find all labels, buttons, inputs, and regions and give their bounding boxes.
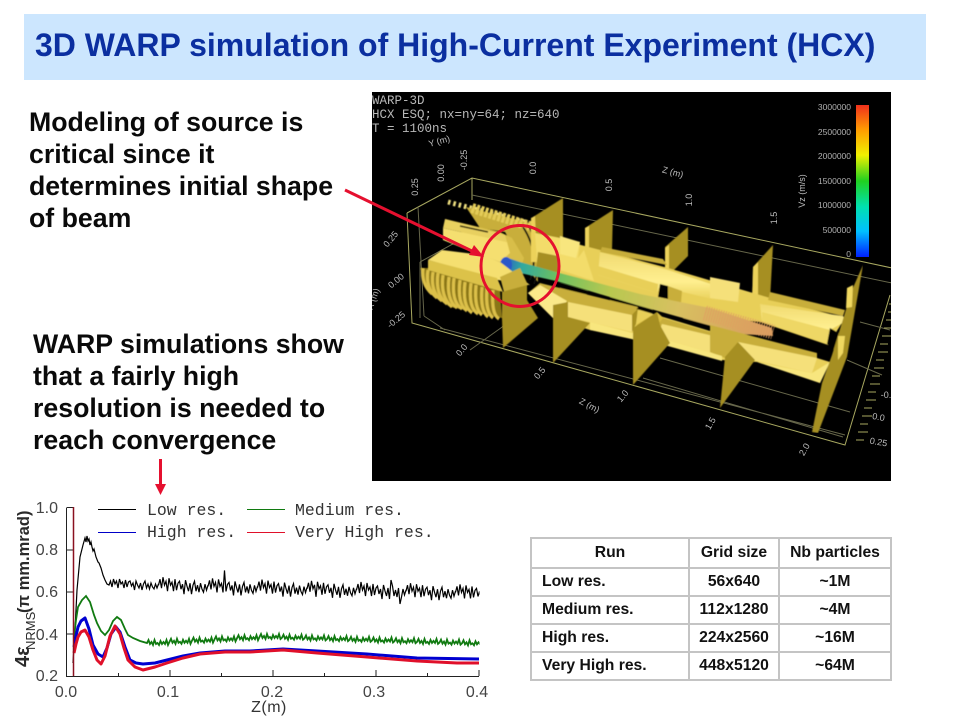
- table: run parameters: Nb particles: [790, 544, 880, 561]
- axis labels: 0.0: [528, 162, 538, 174]
- text block: WARP simulations: [33, 329, 344, 455]
- tick labels: 0.1: [157, 684, 179, 701]
- lower rail segments: [528, 283, 830, 383]
- axis labels: -0.: [881, 390, 891, 400]
- tick labels: 0.4: [36, 627, 58, 644]
- axis labels: 2.0: [797, 442, 812, 457]
- colour bar: 1000000: [818, 200, 851, 210]
- table: run parameters: Run: [595, 544, 625, 561]
- table: run parameters: Very High res.: [542, 657, 647, 674]
- tick labels: 0.2: [36, 668, 58, 685]
- wireframe axes box: [407, 178, 896, 445]
- title banner: [24, 14, 926, 80]
- plate 5: [812, 265, 863, 433]
- electrode structure: [420, 198, 863, 433]
- text block: source modeling: critical since it: [29, 139, 214, 169]
- axis labels: 0.0: [871, 411, 886, 423]
- colour bar: 3000000: [818, 102, 851, 112]
- tick labels: 0.3: [363, 684, 385, 701]
- axis labels: Vz (m/s): [797, 174, 807, 208]
- curve: high res: [74, 618, 479, 664]
- legend: Low res.: [147, 501, 226, 520]
- lower ring stack: [420, 268, 502, 319]
- table: run parameters: ~64M: [815, 657, 855, 674]
- text block: WARP simulations: WARP simulations show: [33, 329, 344, 359]
- text block: WARP simulations: resolution is needed to: [33, 393, 325, 423]
- tick labels: 0.0: [55, 684, 77, 701]
- curve: very high res: [74, 626, 479, 670]
- table: run parameters: [530, 537, 892, 681]
- colour bar: 2500000: [818, 127, 851, 137]
- legend: [98, 501, 434, 542]
- y-axis title: 4ε: [12, 646, 34, 667]
- axis labels: 1.5: [769, 212, 779, 224]
- axis labels: [365, 133, 891, 457]
- y-axis title: [12, 511, 38, 667]
- upper left block: [443, 219, 524, 272]
- upper ring stack: [448, 202, 538, 284]
- text block: WARP simulations: reach convergence: [33, 425, 276, 455]
- plate 1 lower: [502, 285, 538, 348]
- tick labels: 1.0: [36, 500, 58, 517]
- text block: WARP simulations: that a fairly high: [33, 361, 239, 391]
- colour bar: 0: [846, 249, 851, 259]
- lower rail backing: [528, 293, 830, 383]
- y-axis title: NRMS: [23, 611, 38, 650]
- panel: 3D WARP simulation render: [372, 92, 891, 481]
- table: run parameters: ~16M: [815, 629, 855, 646]
- initial spike: [72, 507, 74, 676]
- axis labels: 0.00: [386, 271, 406, 290]
- table: run parameters: 56x640: [708, 573, 760, 590]
- text block: source modeling: [29, 107, 333, 233]
- axis labels: 1.5: [703, 416, 718, 431]
- curve: low res: [73, 536, 505, 663]
- arrow: text to chart: [155, 459, 166, 495]
- axis labels: Z (m): [578, 396, 601, 415]
- axis labels: 1.0: [615, 388, 631, 404]
- colour bar: [818, 102, 869, 259]
- plate 3 lower: [633, 312, 670, 385]
- upper rail backing: [535, 233, 845, 345]
- axis labels: 0.25: [869, 436, 888, 448]
- x-axis title: Z(m): [251, 699, 287, 716]
- table: run parameters: ~1M: [820, 573, 850, 590]
- line chart: emittance vs Z: [12, 500, 488, 716]
- tick labels: 0.2: [261, 684, 283, 701]
- legend: High res.: [147, 523, 236, 542]
- header text: T = 1100ns: [372, 122, 447, 136]
- axis labels: Z (m): [661, 164, 684, 180]
- legend: Medium res.: [295, 501, 404, 520]
- tick labels: [36, 500, 488, 701]
- table: run parameters: Grid size: [701, 544, 767, 561]
- table: run parameters: 112x1280: [700, 601, 768, 618]
- plate side highlights: [531, 216, 758, 304]
- axis labels: Y (m): [427, 133, 451, 149]
- plate 2 lower: [553, 302, 590, 363]
- axis labels: 0.5: [532, 365, 548, 381]
- table: run parameters: 448x5120: [699, 657, 769, 674]
- upper rail segments: [535, 233, 846, 344]
- table: run parameters: High res.: [542, 629, 609, 646]
- colour bar: 1500000: [818, 176, 851, 186]
- middle fill: [668, 286, 682, 315]
- header text: WARP-3D: [372, 94, 425, 108]
- table: run parameters: 224x2560: [699, 629, 769, 646]
- lower left block: [428, 250, 530, 296]
- table: run parameters: Low res.: [542, 573, 606, 590]
- axis labels: -0.25: [385, 309, 407, 330]
- text block: source modeling: Modeling of source is: [29, 107, 303, 137]
- beam of particles: [500, 257, 773, 336]
- axis labels: 0.0: [454, 342, 470, 358]
- legend: Very High res.: [295, 523, 434, 542]
- colour bar: 2000000: [818, 151, 851, 161]
- header text: [372, 94, 560, 136]
- highlight circle: [481, 226, 559, 306]
- axes: [66, 508, 479, 676]
- table: run parameters: ~4M: [820, 601, 850, 618]
- axis labels: 0.5: [604, 179, 614, 191]
- curve: medium res: [74, 596, 484, 645]
- colour bar: 500000: [823, 225, 851, 235]
- tick labels: 0.4: [466, 684, 488, 701]
- text block: source modeling: determines initial shape: [29, 171, 333, 201]
- table: run parameters: Medium res.: [542, 601, 634, 618]
- black gaps: [560, 283, 842, 354]
- axis labels: -0.25: [459, 150, 469, 170]
- axis labels: 0.25: [381, 229, 400, 249]
- plate 4 lower: [720, 342, 755, 408]
- axis labels: 0.00: [436, 164, 446, 182]
- arrow: text to source: [345, 190, 484, 257]
- axis labels: 1.0: [684, 194, 694, 206]
- title: 3D WARP simulation of High-Current Experiment (HCX): [35, 27, 875, 63]
- header text: HCX ESQ; nx=ny=64; nz=640: [372, 108, 560, 122]
- text block: source modeling: of beam: [29, 203, 131, 233]
- tick labels: 0.6: [36, 584, 58, 601]
- tick labels: 0.8: [36, 542, 58, 559]
- back plate tops: [533, 198, 773, 308]
- y-axis title: (π mm.mrad): [15, 511, 33, 613]
- axis labels: 0.25: [410, 178, 420, 196]
